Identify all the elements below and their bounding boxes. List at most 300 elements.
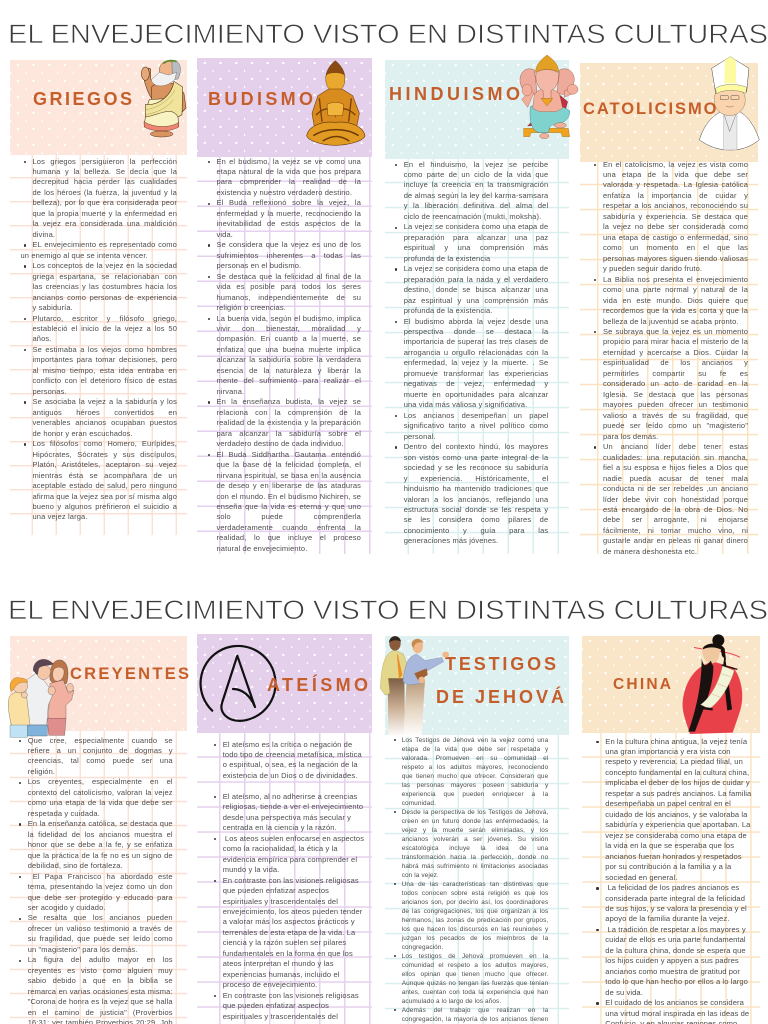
text: china: respeto y reverencia. La piedad filial, un bbox=[605, 757, 743, 766]
text: budismo: mente del sufrimiento para realizar el bbox=[216, 376, 361, 385]
text: griegos: afirma que la vejez sea por sí misma algo bbox=[32, 492, 177, 500]
text: creyentes: tema, presentando la vejez como un don bbox=[28, 882, 173, 891]
text: testigos: respeto a los adultos mayores, reconociendo bbox=[402, 764, 548, 770]
text: testigos: antes, cuentan con toda la experiencia que han bbox=[402, 988, 548, 996]
text: hinduismo: negativas de vejez, enfermedad y bbox=[404, 379, 548, 388]
text: china: La felicidad de los padres ancianos es bbox=[607, 883, 739, 892]
heading: creyentes: CREYENTES bbox=[70, 665, 189, 683]
text: griegos: Los griegos persiguieron la perfección bbox=[32, 156, 177, 166]
text: catolicismo bbox=[594, 160, 748, 556]
text: hinduismo: conocimiento y guía para las bbox=[404, 526, 548, 535]
text: budismo bbox=[208, 156, 361, 553]
text: griegos: ancianos como personas de experiencia bbox=[32, 293, 177, 302]
text: griegos: la vejez era considerada una maldición bbox=[32, 219, 177, 228]
text: hinduismo: estructura social donde se les respeta y bbox=[404, 505, 548, 514]
text: hinduismo: sociedad y se les reconoce su sabiduría bbox=[404, 463, 548, 472]
icon: ganesha bbox=[520, 54, 578, 139]
text: ateismo: espirituales y trascendentales del bbox=[223, 897, 338, 906]
text: griegos: Plutarco, escritor y filósofo griego, bbox=[32, 314, 177, 323]
text: ateismo: mundo y la vida. bbox=[223, 865, 279, 874]
text: griegos: Los filósofos como Homero, Eurípides, bbox=[32, 439, 177, 448]
text: hinduismo: espiritual y una comprensión más bbox=[404, 243, 548, 252]
text: china: concepto fundamental en la cultura china, bbox=[605, 768, 749, 777]
text: catolicismo: propicio para mirar hacia el misterio de la bbox=[603, 337, 748, 346]
text: griegos: venerables ancianos ocupaban puestos bbox=[32, 418, 177, 427]
text: hinduismo: importancia de superar las tres clases de bbox=[404, 337, 548, 346]
icon: buddha bbox=[306, 60, 366, 146]
text: catolicismo: recordemos que la vida es corta y que la bbox=[603, 306, 748, 315]
text: testigos: vejez y la muerte serán eliminadas, y los bbox=[402, 826, 548, 834]
text: griegos: antiguos héroes convertidos en bbox=[32, 408, 177, 417]
text: ateismo: o espiritual, o sea, es la negación de la bbox=[223, 760, 358, 769]
text: catolicismo: valioso a través de su fragilidad, que bbox=[603, 411, 748, 420]
text: testigos: escatológica incluye la idea de una bbox=[402, 844, 548, 852]
text: budismo: religión o creencias. bbox=[216, 303, 286, 312]
text: catolicismo: líder debe vivir con honestidad porque bbox=[603, 494, 748, 504]
text: china: de su vida. bbox=[605, 988, 643, 997]
text: griegos: aceptable estado de salud, pero ninguno bbox=[32, 481, 177, 490]
text: china: En la cultura china antigua, la vejez tenía bbox=[605, 736, 747, 746]
text: creyentes bbox=[19, 736, 173, 1024]
text: ateismo: que pueden enfatizar aspectos bbox=[223, 1001, 329, 1010]
text: ateismo: En contraste con las visiones religiosas bbox=[223, 876, 359, 885]
text: griegos: que la propia muerte y la enfermedad en bbox=[32, 209, 177, 218]
text: catolicismo: enfatiza la importancia de cuidar y bbox=[603, 191, 748, 200]
text: china: apoyo de la familia durante la vejez. bbox=[605, 914, 729, 923]
panel: budismo bbox=[197, 58, 372, 157]
text: griegos: griega espartana, se relacionaban con bbox=[32, 272, 177, 281]
text: catolicismo: Un anciano líder debe tener estas bbox=[603, 442, 748, 451]
text: hinduismo: y la liberación definitiva del alma del bbox=[404, 201, 548, 210]
panel: china bbox=[582, 636, 760, 733]
text: catolicismo: fiel a su esposa e hijos fieles a Dios que bbox=[603, 463, 748, 472]
text: griegos: divina. bbox=[32, 230, 55, 239]
text: budismo: sufrimientos inherentes a todas las bbox=[216, 251, 361, 260]
icon: praying family bbox=[8, 659, 74, 738]
text: creyentes: que debe ser protegido y educado para bbox=[28, 893, 173, 902]
text: creyentes: ofrecer un valioso testimonio a través de bbox=[28, 924, 173, 933]
text: griegos: al mismo tiempo, esta idea entraba en bbox=[32, 366, 177, 375]
text: hinduismo: se les considera como pilares de bbox=[404, 515, 548, 524]
text: catolicismo: Iglesia. Se destaca que las personas bbox=[603, 390, 748, 399]
grid: ateismo bbox=[197, 733, 372, 1024]
text: ateismo: que pueden enfatizar aspectos bbox=[223, 886, 329, 895]
text: testigos: Aunque quizás no tengan las fuerzas que tenían bbox=[402, 980, 548, 986]
text: budismo: vida es posible para todos los seres bbox=[216, 282, 361, 291]
text: testigos: comunidad. bbox=[402, 800, 436, 806]
text: hinduismo: destino, donde se busca alcanzar una bbox=[404, 285, 548, 294]
text: testigos: los que hacen los discursos en las reuniones y bbox=[402, 926, 548, 932]
text: budismo: vida. bbox=[216, 230, 233, 239]
text: hinduismo: son vistos como una parte integral de la bbox=[404, 453, 548, 462]
text: testigos: Los Testigos de Jehová ven la vejez como una bbox=[402, 736, 548, 744]
text: creyentes: "Corona de honra es la vejez que se halla bbox=[28, 997, 173, 1006]
heading: testigos de jehova: DE JEHOVÁ bbox=[436, 686, 564, 707]
text: hinduismo: de almas según la ley del karma-samsara bbox=[404, 191, 548, 200]
text: catolicismo: respetar a los ancianos, reconociendo su bbox=[603, 201, 748, 210]
text: griegos: las creencias y las costumbres hacia los bbox=[32, 282, 177, 291]
text: griegos: y sabiduría. bbox=[32, 303, 73, 312]
text: testigos: juzgan los pecados de los miembros de la bbox=[402, 934, 548, 942]
heading: hinduismo: HINDUISMO bbox=[389, 84, 520, 104]
text: creyentes: Se resalta que los ancianos pueden bbox=[28, 913, 173, 922]
text: budismo: inevitabilidad de estos aspectos de la bbox=[216, 219, 361, 228]
heading: budismo: BUDISMO bbox=[208, 89, 313, 109]
text: budismo: compasión. En cuanto a la muerte, se bbox=[216, 334, 361, 343]
text: budismo: natural de envejecimiento. bbox=[216, 544, 307, 553]
panel: griegos bbox=[10, 60, 187, 155]
text: creyentes: La figura del adulto mayor en los bbox=[28, 955, 173, 964]
text: budismo: enfermedad y la muerte, reconociendo la bbox=[216, 209, 361, 218]
text: ateismo: existencia de un Dios o de divinidades. bbox=[223, 771, 357, 780]
text: creyentes: un "magisterio" para los demás. bbox=[28, 945, 138, 954]
text: testigos: Además del trabajo que realizan en la bbox=[402, 1006, 548, 1014]
text: hinduismo: enfermedad, la vejez y la muerte. . Se bbox=[404, 358, 548, 367]
text: china: ancianos como muestra de gratitud por bbox=[605, 967, 740, 976]
text: budismo: alcanzar la sabiduría sobre la verdadera bbox=[216, 355, 361, 364]
text: catolicismo: En el catolicismo, la vejez es vista como bbox=[603, 160, 748, 168]
text: china bbox=[596, 736, 752, 1024]
heading: testigos de jehova bbox=[436, 654, 564, 707]
panel: ateismo bbox=[197, 634, 372, 733]
text: ateismo: espirituales y trascendentales del bbox=[223, 1012, 338, 1021]
text: ateismo: religiosas, tiende a ver el envejecimiento bbox=[223, 802, 363, 811]
text: china: sabiduría y experiencia que aportaban. La bbox=[605, 820, 750, 829]
panel: creyentes bbox=[10, 636, 187, 731]
text: catolicismo: considerado un acto de caridad en la bbox=[603, 379, 748, 388]
text: catolicismo: y pueden seguir dando fruto. bbox=[603, 264, 702, 273]
panel: hinduismo bbox=[385, 60, 569, 159]
text: china: ancianos fueran honrados y respetados bbox=[605, 852, 742, 861]
text: ateismo: fundamentales en la forma en que los bbox=[223, 949, 353, 958]
panel: testigos bbox=[385, 636, 569, 735]
text: budismo: El Buda Siddhartha Gautama entendió bbox=[216, 450, 361, 459]
text: catolicismo: como una parte normal y natural de la bbox=[603, 285, 748, 294]
text: creyentes: creyentes es visto como alguien muy bbox=[28, 966, 173, 975]
text: ateismo: experiencias humanas, incluido el bbox=[223, 970, 340, 979]
text: catolicismo: fácilmente, ni tomar mucho vino, ni bbox=[603, 526, 748, 535]
text: ateismo: ciencia y la razón suelen ser pilares bbox=[223, 938, 346, 947]
grid: hinduismo bbox=[385, 159, 569, 554]
text: budismo: esencia de la naturaleza y liberar la bbox=[216, 366, 361, 375]
text: griegos: Se estimaba a los viejos como hombres bbox=[32, 345, 177, 354]
text: catolicismo: una etapa de castigo o enfermedad, sino bbox=[603, 233, 748, 242]
text: creyentes: El Papa Francisco ha abordado este bbox=[33, 872, 173, 881]
text: testigos: con la vejez. bbox=[402, 872, 439, 878]
text: budismo: realidad de la existencia y la preparación bbox=[216, 418, 361, 427]
text: hinduismo: En el hinduismo, la vejez se percibe bbox=[404, 160, 548, 168]
text: hinduismo: muerte en oportunidades para alcanzar bbox=[404, 390, 548, 399]
text: hinduismo: incluye la creencia en la transmigración bbox=[404, 180, 548, 189]
text: budismo: vivir con bienestar, moralidad y bbox=[216, 324, 361, 333]
text: testigos: creen en un futuro donde las enfermedades, la bbox=[402, 818, 548, 824]
text: budismo: En la enseñanza budista, la vejez se bbox=[216, 397, 361, 406]
text: budismo: En el budismo, la vejez se ve como una bbox=[216, 156, 361, 166]
text: griegos: mientras ésta se acompañara de un bbox=[32, 471, 177, 480]
text: budismo: de deseo y en liberarse de las ataduras bbox=[216, 481, 361, 490]
text: testigos: congregación. bbox=[402, 944, 443, 950]
icon: two men bbox=[380, 636, 449, 737]
text: hinduismo: generaciones más jóvenes. bbox=[404, 536, 498, 545]
text: catolicismo: cualidades: una reputación sin mancha, bbox=[603, 453, 748, 462]
text: catolicismo: eternidad y acercarse a Dios. Cuidar la bbox=[603, 348, 748, 357]
text: ateismo: desde una perspectiva más secular y bbox=[223, 813, 351, 822]
text: china: la vida en la que se esperaba que los bbox=[605, 841, 734, 850]
text: creyentes: ser acogido y cuidado. bbox=[28, 903, 106, 912]
text: griegos: un enemigo al que se intenta vencer. bbox=[20, 251, 148, 260]
text: china: sociedad en general. bbox=[605, 873, 677, 882]
text: budismo: verdadero destino de cada individuo. bbox=[216, 439, 344, 448]
text: catolicismo: nadie pueda acusar de tener mala bbox=[603, 474, 748, 483]
text: griegos: años. bbox=[32, 334, 52, 343]
text: ateismo: centrada en la ciencia y la razón. bbox=[223, 823, 337, 832]
text: budismo: solo puede comprenderla bbox=[216, 512, 361, 521]
text: catolicismo: permitirles compartir su fe es bbox=[603, 369, 748, 378]
text: china: implicaba el deber de los hijos de cuidar y bbox=[605, 778, 750, 787]
text: griegos: de honor y eran escuchados. bbox=[32, 429, 133, 438]
text: china: de sus hijos, y se valora la presencia y el bbox=[605, 904, 747, 913]
heading: griegos: GRIEGOS bbox=[33, 89, 132, 109]
text: creyentes: honor que se debe a la fe, y se enfatiza bbox=[28, 840, 173, 849]
text: griegos: Hipócrates, Sócrates y sus discípulos, bbox=[32, 450, 177, 459]
text: testigos: que tienen mucho que ofrecer. Consideran que bbox=[402, 772, 548, 780]
text: griegos: Platón, Aristóteles, aceptaron su vejez bbox=[32, 460, 177, 469]
text: hinduismo: perspectiva donde se destaca la bbox=[404, 327, 548, 336]
text: china: considerada parte integral de la felicidad bbox=[605, 894, 745, 903]
heading: catolicismo: CATOLICISMO bbox=[583, 100, 717, 118]
text: china: por su contribución a la familia y a la bbox=[605, 862, 731, 871]
title: top: EL ENVEJECIMIENTO VISTO EN DISTINTAS CULTURAS bbox=[8, 19, 768, 49]
text: catolicismo: para los demás. bbox=[603, 432, 658, 441]
text: catolicismo: de manera deshonesta etc. bbox=[603, 547, 697, 556]
text: creyentes: como una etapa de la vida que debe ser bbox=[28, 798, 173, 807]
text: ateismo: todo tipo de creencia metafísica, mística bbox=[223, 750, 362, 759]
text: catolicismo: está encargado de la obra de Dios. No bbox=[603, 505, 748, 514]
text: catolicismo: debe ser arrogante, ni enojarse bbox=[603, 515, 748, 524]
grid: testigos bbox=[385, 735, 569, 1024]
text: budismo: enfatiza que una buena muerte implica bbox=[216, 345, 361, 354]
text: creyentes: que la práctica de la fe no es un signo de bbox=[28, 851, 173, 860]
heading: china: CHINA bbox=[613, 676, 671, 693]
text: testigos bbox=[394, 736, 548, 1022]
text: catolicismo: La Biblia nos presenta el envejecimiento bbox=[603, 275, 748, 284]
text: catolicismo: una etapa de la vida que debe ser bbox=[603, 170, 748, 179]
text: hinduismo: una vida más valiosa y significativa. bbox=[404, 400, 527, 409]
text: budismo: verdaderamente cuando enfrenta la bbox=[216, 523, 361, 532]
text: testigos: acumulado a lo largo de los años. bbox=[402, 998, 501, 1004]
text: griegos: humana y la belleza. Se decía que la bbox=[32, 167, 177, 176]
text: ateismo: El ateísmo es la crítica o negación de bbox=[223, 740, 352, 748]
text: china: La tradición de respetar a los mayores y bbox=[607, 925, 746, 934]
text: testigos: experiencia que pueden enriquecer a la bbox=[402, 790, 548, 798]
text: creyentes: refiere a un conjunto de dogmas y bbox=[28, 746, 173, 755]
text: testigos: transformación hacia la perfección, donde no bbox=[402, 854, 548, 860]
text: china: una virtud moral inspirada en las ideas de bbox=[605, 1009, 749, 1018]
text: creyentes: creencias, tal como puede ser una bbox=[28, 756, 173, 765]
text: budismo: El Buda reflexionó sobre la vejez, la bbox=[216, 198, 361, 207]
text: griegos bbox=[20, 156, 177, 521]
heading: ateismo: ATEÍSMO bbox=[267, 674, 368, 695]
text: hinduismo: hinduismo ha mantenido tradiciones que bbox=[404, 484, 548, 493]
text: budismo: etapa natural de la vida que nos prepara bbox=[216, 167, 361, 176]
text: budismo: realidad, lo que incluye el proceso bbox=[216, 533, 361, 542]
text: catolicismo: vida en este mundo. Dios quiere que bbox=[603, 296, 748, 305]
text: catolicismo: gustarle andar en peleas ni ganar dinero bbox=[603, 536, 748, 545]
text: hinduismo: preparación para alcanzar una paz bbox=[404, 233, 548, 242]
text: hinduismo: valoran a los ancianos, reflejando una bbox=[404, 494, 548, 504]
text: hinduismo: preparación para la nada y el verdadero bbox=[404, 275, 548, 284]
text: creyentes: sabio debido a que en la biblia se bbox=[28, 976, 173, 985]
text: hinduismo: El budismo aborda la vejez desde una bbox=[404, 317, 548, 326]
text: budismo: para comprender la realidad de la bbox=[216, 177, 361, 186]
text: griegos: personas. bbox=[32, 387, 67, 396]
text: hinduismo: La vejez se considera como una etapa de bbox=[404, 222, 548, 231]
text: testigos: ancianos volverán a ser jóvenes. Su visión bbox=[402, 836, 548, 842]
text: budismo: existencia y nuestro verdadero destino. bbox=[216, 188, 352, 197]
text: creyentes: remarca en varias ocasiones esta misma: bbox=[28, 987, 173, 996]
text: hinduismo: profunda de la existencia. bbox=[404, 306, 493, 315]
text: budismo: relaciona con la comprensión de la bbox=[216, 408, 361, 417]
text: ateismo: terrenales de esta etapa de la vida. La bbox=[223, 928, 355, 937]
text: catolicismo: valorada y respetada. La Iglesia católica bbox=[603, 180, 748, 189]
text: budismo: humanos, independientemente de su bbox=[216, 293, 361, 302]
text: griegos: EL envejecimiento es representado como bbox=[32, 240, 177, 249]
text: griegos: una vejez larga. bbox=[32, 512, 88, 521]
text: budismo: para alcanzar la sabiduría sobre el bbox=[216, 429, 361, 438]
text: testigos: habrá más sufrimiento ni limitaciones asociadas bbox=[402, 862, 548, 870]
text: testigos: valorada. Promueven en su comunidad el bbox=[402, 754, 548, 762]
text: griegos: belleza), por lo que era considerada peor bbox=[32, 198, 177, 207]
text: budismo: La buena vida, según el budismo, implica bbox=[216, 314, 361, 323]
text: testigos: todos conocen sobre esta religión es que los bbox=[402, 890, 548, 896]
text: catolicismo: belleza de la juventud se acaba pronto. bbox=[603, 317, 739, 326]
text: hinduismo: personal. bbox=[404, 432, 436, 441]
title: bottom: EL ENVEJECIMIENTO VISTO EN DISTINTAS CULTURAS bbox=[8, 595, 768, 625]
text: hinduismo bbox=[395, 160, 548, 545]
text: hinduismo: y experiencia. Históricamente, el bbox=[404, 474, 548, 483]
text: china: una gran importancia y era vista con bbox=[605, 747, 731, 756]
text: hinduismo: promueve transformar las experiencias bbox=[404, 369, 548, 378]
text: creyentes: respetada y cuidada. bbox=[28, 809, 100, 818]
text: creyentes: contexto del catolicismo, valoran la vejez bbox=[28, 788, 173, 797]
text: creyentes: su fragilidad, que puede ser leído como bbox=[28, 934, 173, 943]
text: china: El cuidado de los ancianos se considera bbox=[605, 998, 744, 1007]
text: budismo: que la base de la felicidad completa, el bbox=[216, 460, 361, 469]
text: budismo: personas en el budismo. bbox=[216, 261, 301, 270]
text: griegos: decrepitud hacia perder las cualidades bbox=[32, 177, 177, 186]
text: catolicismo: personas mayores siguen siendo valiosas bbox=[603, 254, 748, 263]
text: catolicismo: mayores pueden ofrecer un testimonio bbox=[603, 400, 748, 409]
text: china: respetar a sus padres ancianos. La familia bbox=[605, 789, 751, 798]
text: ateismo: envejecimiento, los ateos pueden tender bbox=[223, 907, 362, 916]
text: testigos: hermanos, las zonas de predicación por grupos, bbox=[402, 916, 548, 924]
text: catolicismo: sabiduría y experiencia. Se destaca que bbox=[603, 212, 748, 221]
text: hinduismo: La vejez se considera como una etapa de bbox=[404, 264, 548, 273]
text: china: cuidado de los ancianos, y se valoraba la bbox=[605, 810, 747, 819]
text: catolicismo: conducta ni de ser rebeldes ,un anciano bbox=[603, 484, 748, 493]
text: budismo: nirvana. bbox=[216, 387, 244, 396]
grid: china bbox=[582, 733, 760, 1024]
text: budismo: enseña que la vida es eterna y que uno bbox=[216, 502, 361, 511]
text: catolicismo: como un momento en el que las bbox=[603, 243, 748, 252]
text: china: cuidar de ellos es una parte fundamental bbox=[605, 935, 746, 944]
text: griegos: conflicto con el deterioro físico de estas bbox=[32, 376, 177, 385]
text: testigos: Desde la perspectiva de los Testigos de Jehová, bbox=[402, 808, 548, 816]
text: creyentes: religión. bbox=[28, 767, 55, 776]
text: testigos: ellos opinan que tienen mucho que ofrecer. bbox=[402, 970, 548, 978]
text: ateismo bbox=[214, 740, 364, 1021]
text: budismo: nirvana espiritual, se basa en la ausencia bbox=[216, 471, 361, 480]
text: china: de la cultura china, donde se espera que bbox=[605, 946, 746, 955]
text: catolicismo: espiritualidad de los ancianos y bbox=[603, 358, 748, 367]
text: ateismo: ateos interpretan el mundo y las bbox=[223, 959, 334, 968]
text: testigos: etapa de la vida que debe ser respetada y bbox=[402, 746, 548, 752]
text: china: los hijos cuiden y apoyen a sus padres bbox=[605, 956, 739, 965]
text: hinduismo: arrogancia u orgullo relacionadas con la bbox=[404, 348, 548, 357]
text: creyentes: debilidad, sino de fortaleza. bbox=[28, 861, 123, 870]
text: griegos: estableció el inicio de la vejez a los 50 bbox=[32, 324, 177, 333]
text: testigos: ancianos son, por decirlo así, los coordinadores bbox=[402, 898, 548, 906]
text: budismo: Se considera que la vejez es uno de los bbox=[216, 240, 361, 249]
text: hinduismo: como parte de un ciclo de la vida que bbox=[404, 170, 548, 179]
text: testigos: las personas mayores poseen sabiduría y bbox=[402, 782, 548, 788]
icon: pope bbox=[699, 56, 760, 150]
text: testigos: comunidad el respeto a los adultos mayores, bbox=[402, 962, 548, 968]
grid: budismo bbox=[197, 157, 372, 554]
text: hinduismo: profunda de la existencia bbox=[404, 254, 490, 263]
text: catolicismo: puede ser leído como un "magisterio" bbox=[603, 421, 748, 430]
text: griegos: Se asociaba la vejez a la sabiduría y los bbox=[32, 397, 177, 406]
text: ateismo: Los ateos suelen enfocarse en aspectos bbox=[225, 834, 364, 843]
grid: creyentes bbox=[10, 731, 187, 1024]
text: china: todo lo que han hecho por ellos a lo largo bbox=[605, 977, 748, 986]
text: hinduismo: ciclo de reencarnación (mukti, moksha). bbox=[404, 212, 541, 221]
text: ateismo: El ateísmo, al no adherirse a creencias bbox=[223, 792, 357, 801]
text: ateismo: como la racionalidad, la ética y la bbox=[223, 844, 338, 853]
icon: greek philosopher bbox=[141, 60, 186, 138]
panel: catolicismo bbox=[580, 63, 758, 162]
text: testigos: Los testigos de Jehová promueven en la bbox=[402, 952, 548, 960]
text: china: vejez se consideraba como una etapa de bbox=[605, 831, 747, 840]
text: testigos: Una de las características tan distintivas que bbox=[402, 880, 548, 888]
text: ateismo: evidencia empírica para comprender el bbox=[223, 855, 357, 864]
text: hinduismo: Los ancianos desempeñan un papel bbox=[404, 411, 548, 420]
text: creyentes: en el camino de justicia" (Proverbios bbox=[28, 1008, 173, 1017]
text: testigos: de las congregaciones, los que organizan a los bbox=[402, 908, 548, 914]
text: hinduismo: Dentro del contexto hindú, los mayores bbox=[404, 442, 548, 451]
grid: griegos bbox=[10, 155, 187, 535]
text: testigos: congregación, la mayoría de los ancianos tienen bbox=[402, 1016, 548, 1022]
text: creyentes: En la enseñanza católica, se destaca que bbox=[28, 819, 173, 828]
text: budismo: Se destaca que la felicidad al final de la bbox=[216, 272, 361, 281]
text: budismo: con el mundo. En el budismo Nichiren, se bbox=[216, 492, 361, 500]
text: catolicismo: la vejez no debe ser considerada como bbox=[603, 222, 748, 231]
text: hinduismo: paz espiritual y una comprensión más bbox=[404, 296, 548, 305]
text: hinduismo: significativo tanto a nivel político como bbox=[404, 421, 548, 430]
text: creyentes: la fidelidad de los ancianos muestra el bbox=[28, 830, 173, 839]
text: ateismo: En contraste con las visiones religiosas bbox=[223, 991, 359, 1000]
text: griegos: Los conceptos de la vejez en la sociedad bbox=[32, 261, 177, 270]
icon: chinese scholar bbox=[682, 634, 742, 734]
heading: testigos de jehova: TESTIGOS bbox=[445, 654, 556, 674]
text: creyentes: Los creyentes, especialmente en el bbox=[28, 777, 173, 786]
grid: catolicismo bbox=[580, 162, 758, 554]
text: creyentes: Que cree, especialmente cuando se bbox=[28, 736, 173, 744]
text: griegos: de los héroes (la fuerza, la juventud y la bbox=[32, 188, 177, 197]
icon: atheist symbol bbox=[199, 644, 277, 722]
text: china: desempeñaba un papel central en el bbox=[605, 799, 731, 808]
text: ateismo: a valorar más los aspectos prácticos y bbox=[223, 917, 355, 926]
